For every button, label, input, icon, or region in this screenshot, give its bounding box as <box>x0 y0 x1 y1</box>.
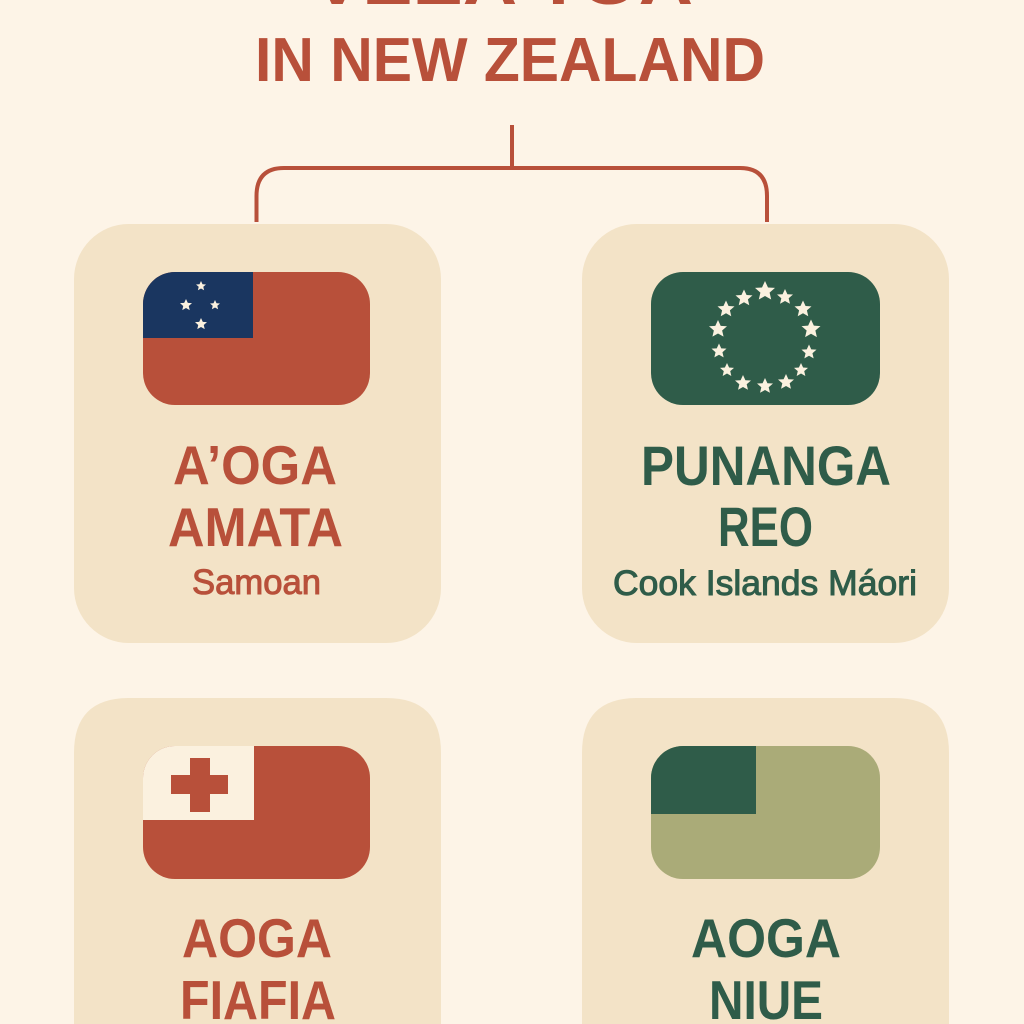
panel: Niuean <box>582 698 949 1024</box>
icon: Samoan flag <box>143 272 370 405</box>
heading: A'oga Amata: A’OGA <box>173 434 337 496</box>
icon: Cook Islands flag <box>651 272 880 405</box>
heading: Aoga Niue: AOGA <box>691 907 841 969</box>
label: Samoan: Samoan <box>192 563 321 602</box>
heading: Aoga Fiafia: AOGA <box>182 907 332 969</box>
title: IN NEW ZEALAND <box>255 26 765 95</box>
label: Cook Islands Maori: Cook Islands Máori <box>613 564 917 603</box>
connector: bracket to the cards <box>256 125 767 222</box>
panel: Samoan <box>74 224 441 643</box>
title <box>255 0 765 95</box>
panel: Cook Islands Maori <box>582 224 949 643</box>
heading line two: REO <box>718 495 813 558</box>
panel: Tongan <box>74 698 441 1024</box>
icon: Tongan flag <box>143 746 370 879</box>
heading: Punanga Reo: PUNANGA <box>641 434 891 497</box>
icon: Niue flag <box>651 746 880 879</box>
heading line two: AMATA <box>168 496 343 558</box>
